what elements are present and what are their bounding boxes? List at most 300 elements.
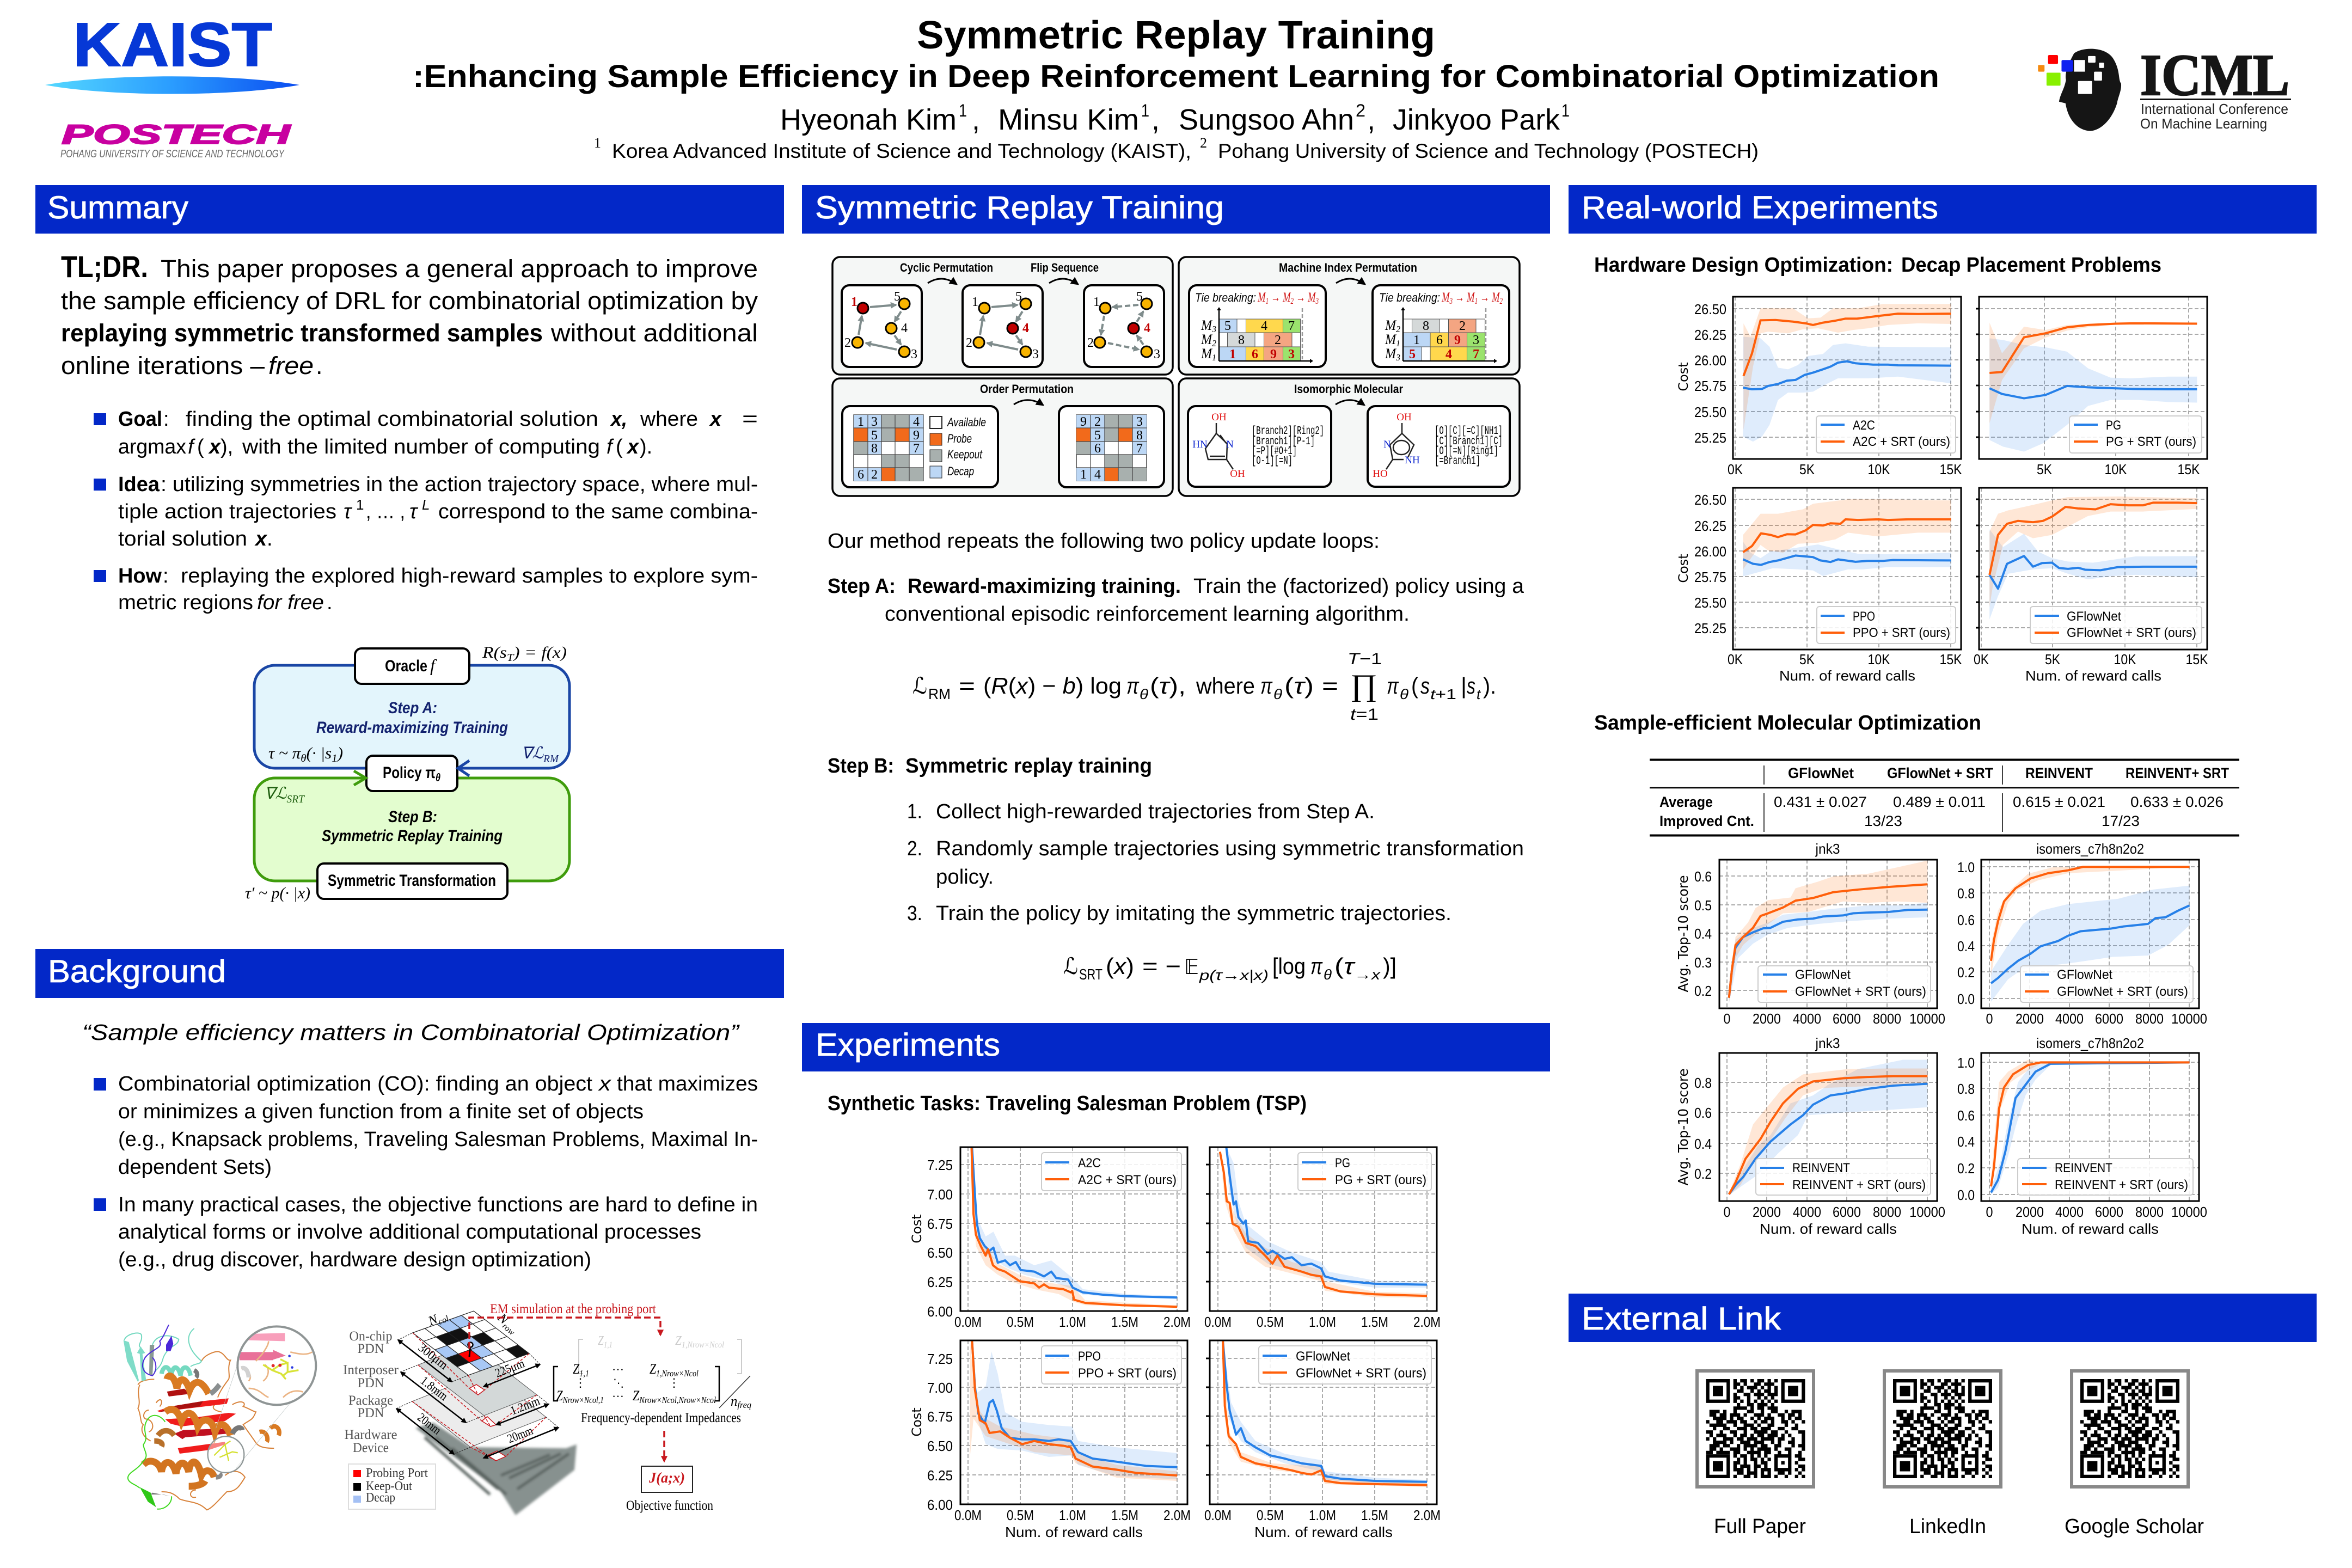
authors: 2 — [1356, 101, 1365, 120]
bullet: goal: ), — [220, 436, 233, 458]
equation: RM loss: (τ) — [1284, 673, 1314, 699]
objective label: Objective function — [626, 1498, 713, 1513]
bullet: idea: correspond to the same combina- — [438, 500, 758, 523]
chart: decap PPO: PPO + SRT (ours) — [1853, 626, 1950, 640]
chart: TSP PG: 0.5M — [1257, 1314, 1284, 1330]
chart: isomers REINVENT: Num. of reward calls — [2022, 1221, 2159, 1237]
equation: RM loss: (R(x) − b) log — [983, 673, 1122, 699]
chart: TSP PPO: PPO — [1078, 1349, 1101, 1364]
chart: decap A2C: 25.75 — [1694, 378, 1726, 394]
chart: jnk3 GFlowNet — [1675, 841, 1945, 1027]
authors — [780, 101, 1570, 136]
equation: SRT loss: = − — [1142, 953, 1181, 979]
policy box: θ — [436, 772, 440, 784]
QR: full paper — [1697, 1371, 1814, 1538]
table: molecular results: REINVENT — [2025, 765, 2093, 781]
gantt right: 4 — [1445, 347, 1452, 362]
dimension arrows: 300μm — [415, 1340, 451, 1372]
chart: decap A2C: 15K — [1939, 461, 1962, 477]
text block: TL;DR — [61, 249, 758, 379]
chart: decap PG — [1976, 297, 2207, 477]
chart: isomers GFlowNet: 0.8 — [1957, 885, 1975, 902]
gantt left: 1 — [1229, 347, 1236, 362]
equation: RM loss: θ — [1140, 686, 1148, 702]
equation: SRT loss: →x — [1354, 966, 1381, 983]
gantt left: 3 — [1288, 347, 1295, 362]
chart: TSP PPO: 7.00 — [927, 1380, 953, 1396]
placement grid right: 5 — [1094, 428, 1101, 443]
EM simulation label: EM simulation at the probing port — [490, 1302, 656, 1316]
oracle box: f — [430, 656, 437, 675]
step A box: θ — [301, 752, 307, 764]
chart: decap A2C: 25.50 — [1694, 404, 1726, 420]
placement grid left: 5 — [871, 428, 878, 443]
chart: jnk3 REINVENT: jnk3 — [1815, 1035, 1840, 1051]
dimension arrows: N — [426, 1312, 440, 1328]
step A box: τ ~ π — [268, 744, 299, 762]
chart: isomers REINVENT: 2000 — [2016, 1204, 2044, 1220]
tour card 1: 2 — [844, 336, 851, 350]
placement grid right: 2 — [1094, 415, 1101, 429]
chart: isomers REINVENT: 10000 — [2171, 1204, 2207, 1220]
bullet: idea: x — [254, 528, 268, 550]
chart: decap GFlowNet: GFlowNet — [2067, 609, 2121, 624]
equation: RM loss: s — [1420, 673, 1430, 699]
chart: decap PPO: PPO — [1853, 609, 1875, 624]
heading: Background: Background — [48, 954, 226, 989]
equation: SRT loss — [1063, 953, 1396, 983]
gantt right: 7 — [1473, 347, 1479, 362]
text block: step B: 1. — [907, 800, 922, 823]
chart: jnk3 GFlowNet: 8000 — [1873, 1010, 1901, 1027]
impedance matrix: 1,1 — [604, 1340, 612, 1350]
bullet: idea: : utilizing symmetries in the action trajectory space, where mul- — [161, 473, 758, 496]
chart: TSP PPO: PPO + SRT (ours) — [1078, 1366, 1177, 1381]
bullet: how: How — [118, 565, 162, 587]
authors: , — [972, 103, 980, 136]
chart: isomers REINVENT: 6000 — [2095, 1204, 2123, 1220]
chart: isomers GFlowNet: GFlowNet + SRT (ours) — [2057, 984, 2188, 999]
text block: step B: Randomly sample trajectories using symmetric transformation — [936, 837, 1524, 860]
equation: RM loss: t+1 — [1430, 686, 1456, 702]
impedance matrix: … — [612, 1359, 624, 1373]
gantt right: M — [1385, 317, 1397, 333]
equation: RM loss: π — [1126, 673, 1140, 699]
heading: Summary — [35, 185, 784, 234]
text block: TL;DR: This paper proposes a general approach to improve — [161, 255, 758, 283]
impedance matrix: Z — [675, 1334, 682, 1348]
tour card 3 — [1084, 285, 1164, 367]
step A box — [254, 665, 569, 768]
equation: SRT loss: SRT — [1079, 966, 1102, 983]
chart: decap A2C: 25.25 — [1694, 430, 1726, 446]
gantt left: 6 — [1252, 347, 1258, 362]
QR: LinkedIn — [1884, 1371, 2001, 1538]
panel: external link — [1569, 1294, 2317, 1538]
figure: cyclic and flip symmetry: Flip Sequence — [1031, 261, 1099, 274]
chart: decap PPO: 10K — [1867, 651, 1890, 667]
molecule right: HO — [1373, 468, 1388, 480]
dimension arrows: col — [437, 1314, 450, 1327]
layer labels: Hardware — [344, 1428, 397, 1442]
authors: , — [1367, 103, 1375, 136]
equation: RM loss: = — [1322, 673, 1338, 699]
equation: RM loss: ∏ — [1350, 669, 1377, 702]
chart: decap A2C: 10K — [1867, 461, 1890, 477]
table: molecular results: GFlowNet + SRT — [1887, 765, 1993, 781]
chart: decap PG: PG — [2106, 418, 2121, 433]
chart: TSP A2C: 7.00 — [927, 1186, 953, 1203]
affiliations: 1 — [594, 135, 601, 151]
affiliations: Korea Advanced Institute of Science and Technology (KAIST), — [612, 140, 1191, 162]
gantt left: M — [1201, 317, 1213, 333]
bullet: goal: argmax — [118, 436, 186, 458]
placement grid right: 1 — [1080, 468, 1087, 482]
chart: TSP A2C: 2.0M — [1163, 1314, 1191, 1330]
symmetric transformation box — [317, 863, 507, 899]
gantt left: 1 — [1265, 297, 1269, 306]
chart: TSP PG: 1.5M — [1361, 1314, 1388, 1330]
chart: decap A2C — [1676, 297, 1962, 477]
placement grid right — [1059, 406, 1164, 487]
subheading: TSP: Synthetic Tasks: Traveling Salesman Problem (TSP) — [828, 1092, 1307, 1115]
tour card 2: 4 — [1022, 321, 1029, 335]
interposer layer — [418, 1344, 537, 1416]
chart: decap PPO: 25.25 — [1694, 620, 1726, 636]
logo: POSTECH — [60, 119, 291, 160]
equation: RM loss: ). — [1483, 673, 1496, 699]
impedance matrix: ⋮ — [668, 1376, 680, 1389]
reward equation: T — [507, 652, 515, 664]
table: molecular results: GFlowNet — [1788, 765, 1854, 781]
chart: TSP GFlowNet: 0.5M — [1257, 1507, 1284, 1523]
title: Symmetric Replay Training — [917, 14, 1435, 57]
text block: step B: policy. — [936, 866, 994, 889]
gantt left: 9 — [1270, 347, 1277, 362]
bullet: how: replaying the explored high-reward samples to explore sym- — [181, 565, 758, 587]
policy box: Policy π — [383, 764, 448, 782]
bullet: combinatorial optimization: that maximizes — [617, 1073, 758, 1095]
molecule left: [O-1][=N] — [1252, 455, 1293, 468]
tour card 2: 3 — [1032, 347, 1039, 362]
chart: isomers GFlowNet: 0.0 — [1957, 991, 1975, 1007]
molecule left: [Branch2][Ring2] — [1252, 425, 1324, 438]
impedance matrix: Nrow×Ncol,1 — [562, 1395, 604, 1405]
placement grid left: 6 — [857, 468, 864, 482]
tour card 1: 4 — [901, 321, 908, 335]
gantt left: 2 — [1212, 338, 1216, 348]
chart: TSP PPO: 7.25 — [927, 1351, 953, 1367]
chart: TSP A2C: A2C + SRT (ours) — [1078, 1173, 1177, 1187]
chart: decap PPO: 25.75 — [1694, 569, 1726, 585]
layer labels: Device — [353, 1441, 389, 1455]
chart: TSP GFlowNet — [1204, 1340, 1441, 1540]
chart: decap A2C: 5K — [1799, 461, 1815, 477]
chart: jnk3 GFlowNet: 0.2 — [1694, 983, 1712, 999]
diagram: SRT loop — [245, 644, 569, 902]
text block: TL;DR: without additional — [550, 319, 758, 347]
equation: RM loss: where — [1196, 673, 1255, 699]
chart: TSP A2C: 7.25 — [927, 1157, 953, 1173]
tour card 3: 3 — [1154, 347, 1160, 362]
heading: Summary: Summary — [47, 190, 188, 225]
impedance matrix: freq — [737, 1400, 751, 1410]
chart: TSP GFlowNet: 0.0M — [1204, 1507, 1232, 1523]
panel: experiments — [802, 1023, 1550, 1540]
figure: protein structure — [124, 1325, 316, 1510]
arrow: green to policy — [338, 771, 366, 785]
chart: TSP A2C: 6.25 — [927, 1274, 953, 1290]
text block: TL;DR: free — [268, 352, 314, 379]
bullet: practical cases: analytical forms or involve additional computational processes — [118, 1221, 701, 1244]
bullet: practical cases: In many practical cases, the objective functions are hard to define in — [118, 1193, 758, 1216]
tour card 1: 5 — [894, 290, 901, 304]
red guide lines — [412, 1333, 546, 1461]
chart: isomers GFlowNet: GFlowNet — [2057, 967, 2112, 982]
equation: RM loss: ℒ — [912, 672, 927, 699]
placement grid right: 8 — [1136, 428, 1143, 443]
molecule right: [C][Branch1][C] — [1435, 436, 1503, 448]
table: molecular results: 17/23 — [2102, 813, 2140, 829]
panel: real-world experiments — [1569, 185, 2317, 1237]
chart: jnk3 REINVENT: 2000 — [1753, 1204, 1781, 1220]
subheading: hardware: Decap Placement Problems — [1901, 254, 2161, 277]
subheading: hardware — [1594, 254, 2161, 277]
table: molecular results: 0.633 ± 0.026 — [2130, 794, 2224, 810]
equation: RM loss: t — [1477, 686, 1481, 702]
heading: Symmetric Replay Training — [802, 185, 1550, 234]
chart: decap PPO — [1676, 488, 1962, 684]
reward equation: R(s — [482, 644, 504, 661]
table: molecular results: REINVENT+ SRT — [2126, 765, 2229, 781]
gantt left: Tie breaking: — [1195, 291, 1256, 304]
equation: RM loss: θ — [1400, 686, 1408, 702]
impedance matrix: 1,Nrow×Ncol — [656, 1368, 699, 1379]
gantt left: 7 — [1288, 319, 1295, 333]
oracle box: Oracle — [385, 657, 427, 675]
package layer — [412, 1371, 546, 1447]
QR: full paper: Full Paper — [1714, 1515, 1806, 1538]
step B box: Step B: — [388, 808, 437, 826]
objective box: J(a;x) — [648, 1469, 685, 1486]
chart: TSP PPO: 6.25 — [927, 1467, 953, 1484]
chart: isomers GFlowNet: 0.6 — [1957, 912, 1975, 928]
placement grid right: 4 — [1094, 468, 1101, 482]
gantt left: M — [1258, 290, 1269, 305]
step B box: Symmetric Replay Training — [322, 827, 503, 845]
text block: step A: conventional episodic reinforcement learning algorithm. — [885, 603, 1410, 626]
table: molecular results — [1650, 760, 2239, 835]
heading: External Link: External Link — [1582, 1301, 1781, 1337]
equation: SRT loss: ℒ — [1063, 953, 1078, 979]
port cut-outs — [469, 1385, 506, 1461]
chart: isomers REINVENT: REINVENT + SRT (ours) — [2055, 1178, 2188, 1192]
figure: cyclic and flip symmetry — [832, 257, 1173, 375]
equation: RM loss: | — [1461, 673, 1467, 699]
equation: SRT loss: θ — [1324, 966, 1332, 983]
bullet: goal: where — [640, 408, 698, 431]
chart: jnk3 GFlowNet: 4000 — [1793, 1010, 1821, 1027]
molecule left: OH — [1230, 468, 1245, 480]
bullet: goal: finding the optimal combinatorial solution — [186, 408, 598, 431]
gantt right: 3 — [1395, 352, 1400, 363]
figure: isomorphic molecular: Isomorphic Molecular — [1294, 382, 1403, 396]
chart: isomers GFlowNet: 0.4 — [1957, 938, 1975, 954]
bullet: practical cases — [94, 1193, 758, 1271]
gantt right: M — [1385, 346, 1397, 362]
chart: isomers GFlowNet: isomers_c7h8n2o2 — [2036, 841, 2144, 857]
heading: Experiments — [802, 1023, 1550, 1071]
text block: step B: Collect high-rewarded trajectories from Step A. — [936, 800, 1375, 823]
equation: RM loss: θ — [1273, 686, 1282, 702]
equation: RM loss: s — [1467, 673, 1475, 699]
chart: TSP PPO: Num. of reward calls — [1005, 1524, 1143, 1540]
chart: jnk3 GFlowNet: 0.3 — [1694, 954, 1712, 971]
gantt right: → M — [1478, 290, 1500, 305]
placement grid right: 3 — [1136, 415, 1143, 429]
gantt right: 3 — [1449, 297, 1453, 306]
equation: RM loss: t=1 — [1350, 706, 1379, 724]
chart: jnk3 GFlowNet: GFlowNet + SRT (ours) — [1795, 984, 1926, 999]
step B box: ∇ℒ — [265, 785, 287, 803]
gantt right: M — [1385, 332, 1397, 347]
impedance matrix: n — [731, 1393, 738, 1409]
chart: TSP GFlowNet: GFlowNet + SRT (ours) — [1296, 1366, 1426, 1381]
impedance matrix: … — [612, 1386, 624, 1400]
molecule left — [1188, 406, 1331, 487]
chart: jnk3 GFlowNet: 0 — [1724, 1010, 1730, 1027]
chart: decap PPO: 0K — [1728, 651, 1743, 667]
arrow: to objective — [663, 1431, 665, 1461]
equation: RM loss — [912, 650, 1496, 724]
logo: POSTECH: POSTECH — [62, 119, 291, 150]
chart: isomers GFlowNet: 2000 — [2016, 1010, 2044, 1027]
chart: TSP GFlowNet: 2.0M — [1413, 1507, 1441, 1523]
equation: RM loss: = — [959, 673, 975, 699]
logo: KAIST: KAIST — [73, 10, 272, 79]
bullet: goal: f — [607, 436, 614, 458]
molecule right — [1368, 406, 1510, 487]
logo: ICML: International Conference — [2141, 101, 2288, 117]
chart: jnk3 GFlowNet: 6000 — [1833, 1010, 1861, 1027]
bullet: idea: L — [422, 497, 430, 513]
impedance matrix: Z — [633, 1388, 640, 1404]
chart: TSP GFlowNet: 1.0M — [1309, 1507, 1336, 1523]
chart: TSP PG — [1204, 1147, 1441, 1330]
text block: step B: Train the policy by imitating the symmetric trajectories. — [936, 902, 1451, 925]
equation: SRT loss: π — [1310, 953, 1323, 979]
bullet: idea: , … , — [366, 500, 405, 523]
bullet: idea: Idea — [118, 473, 160, 496]
chart: isomers REINVENT: 0.0 — [1957, 1187, 1975, 1203]
equation: SRT loss: )] — [1383, 953, 1396, 979]
authors: Sungsoo Ahn — [1179, 103, 1354, 136]
gantt right: 2 — [1499, 297, 1503, 306]
text block: step A: Reward-maximizing training. — [908, 575, 1181, 598]
chart: TSP A2C: 0.5M — [1007, 1314, 1034, 1330]
table: molecular results: 0.615 ± 0.021 — [2013, 794, 2105, 810]
bullet: idea: torial solution — [118, 528, 247, 550]
dimension arrows: 1.2mm — [509, 1394, 542, 1418]
panel: background — [35, 949, 784, 1515]
text block: TL;DR: the sample efficiency of DRL for combinatorial optimization by — [61, 287, 758, 315]
molecule left: [Branch1][P-1] — [1252, 436, 1315, 448]
equation: RM loss: RM — [928, 685, 951, 702]
chart: TSP GFlowNet: GFlowNet — [1296, 1349, 1350, 1364]
gantt left: 1 — [1212, 352, 1216, 363]
bullet: goal: = — [742, 408, 758, 431]
subheading: hardware: Hardware Design Optimization: — [1594, 254, 1893, 277]
chart: jnk3 REINVENT: 10000 — [1909, 1204, 1945, 1220]
chart: isomers REINVENT: 4000 — [2055, 1204, 2084, 1220]
chart: decap PPO: 26.25 — [1694, 518, 1726, 534]
chart: TSP PG: PG — [1335, 1156, 1350, 1171]
chart: decap A2C: 26.25 — [1694, 327, 1726, 343]
placement legend: Available — [946, 415, 986, 429]
chart: TSP PPO: 6.50 — [927, 1438, 953, 1454]
figure: PDN hardware stack — [343, 1302, 751, 1515]
chart: jnk3 GFlowNet: Avg. Top-10 score — [1675, 875, 1691, 992]
bullet: idea: τ — [344, 500, 353, 523]
chart: TSP PPO: 1.5M — [1111, 1507, 1138, 1523]
step A box: ) — [336, 744, 343, 762]
impedance matrix: ⋱ — [613, 1376, 624, 1389]
impedance matrix: Z — [556, 1388, 564, 1404]
authors: , — [1152, 103, 1160, 136]
chart: decap GFlowNet: 5K — [2045, 651, 2061, 667]
chart: TSP PG: 0.0M — [1204, 1314, 1232, 1330]
table: molecular results: Improved Cnt. — [1659, 813, 1754, 829]
chart: TSP PG: PG + SRT (ours) — [1335, 1173, 1426, 1187]
bullet: idea: τ — [409, 500, 419, 523]
chart: isomers REINVENT: 0.6 — [1957, 1107, 1975, 1124]
gantt left: 4 — [1261, 319, 1267, 333]
logo: ICML: ICML — [2140, 43, 2289, 108]
chart: TSP A2C: 0.0M — [954, 1314, 982, 1330]
chart: jnk3 REINVENT: 0.6 — [1694, 1105, 1712, 1121]
affiliations: Pohang University of Science and Technology (POSTECH) — [1218, 140, 1759, 162]
chart: jnk3 GFlowNet: 0.6 — [1694, 868, 1712, 885]
placement legend: Keepout — [947, 448, 983, 461]
chart: jnk3 REINVENT: 0 — [1724, 1204, 1730, 1220]
table: molecular results: Average — [1659, 794, 1713, 810]
molecule left: N — [1226, 439, 1234, 450]
equation: SRT loss: (τ — [1334, 953, 1356, 979]
chart: TSP A2C: Cost — [909, 1214, 924, 1244]
gantt right: 2 — [1396, 324, 1400, 334]
chart: jnk3 REINVENT: 8000 — [1873, 1204, 1901, 1220]
bullet: goal: x — [626, 436, 640, 458]
bullet: idea — [94, 473, 758, 550]
chart: TSP GFlowNet: Num. of reward calls — [1254, 1524, 1393, 1540]
dimension arrows — [396, 1308, 559, 1458]
tour card 2 — [963, 285, 1043, 367]
gantt right: 3 — [1473, 333, 1479, 347]
chart: jnk3 REINVENT: REINVENT + SRT (ours) — [1792, 1178, 1926, 1192]
molecule right: [O][C][=C][NH1] — [1435, 425, 1503, 438]
impedance matrix: Z — [598, 1334, 605, 1348]
chart: TSP PG: 1.0M — [1309, 1314, 1336, 1330]
gantt right: 6 — [1436, 333, 1443, 347]
chart: isomers REINVENT: 1.0 — [1957, 1055, 1975, 1071]
text block: step B — [828, 755, 1524, 925]
panel: symmetric replay training — [802, 185, 1550, 983]
placement grid left: 7 — [913, 442, 920, 456]
bullet: goal: ( — [197, 436, 204, 458]
chart: decap PG: PG + SRT (ours) — [2106, 434, 2196, 449]
quote: “Sample efficiency matters in Combinatorial Optimization” — [82, 1020, 740, 1045]
step B box: SRT — [287, 793, 305, 805]
